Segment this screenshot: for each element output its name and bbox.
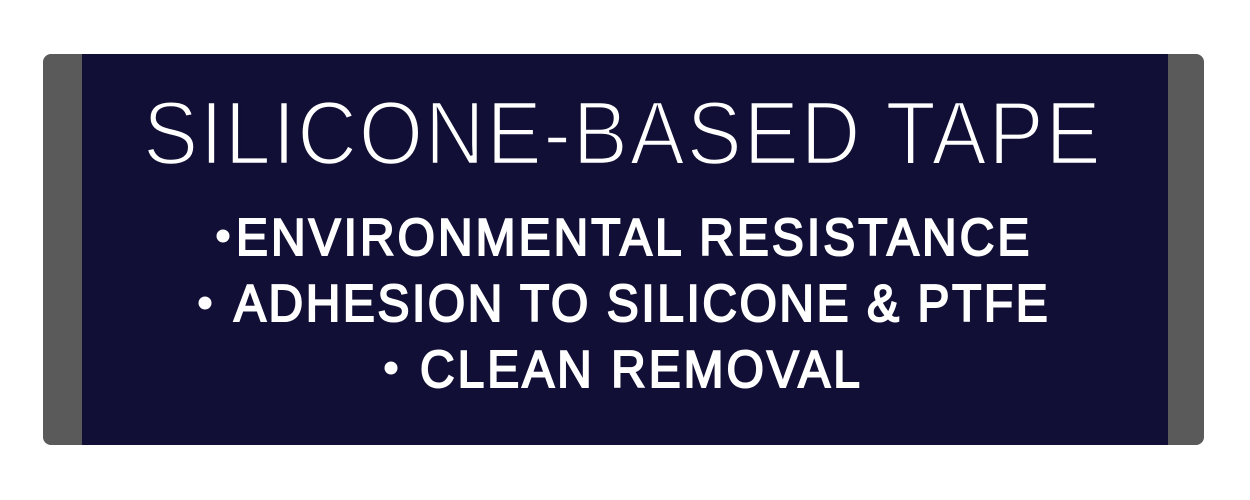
navy centre panel	[82, 54, 1168, 445]
grey left tape end	[43, 54, 82, 445]
bullet: environmental resistance: ENVIRONMENTAL RESISTANCE	[236, 208, 1029, 266]
title: SILICONE-BASED TAPE	[143, 84, 1101, 184]
grey right tape end	[1168, 54, 1204, 445]
tape label panel	[43, 54, 1204, 445]
bullet: adhesion to silicone and PTFE: ADHESION TO SILICONE & PTFE	[234, 274, 1048, 332]
bullet list	[198, 208, 1048, 398]
bullet: clean removal: CLEAN REMOVAL	[420, 340, 860, 398]
